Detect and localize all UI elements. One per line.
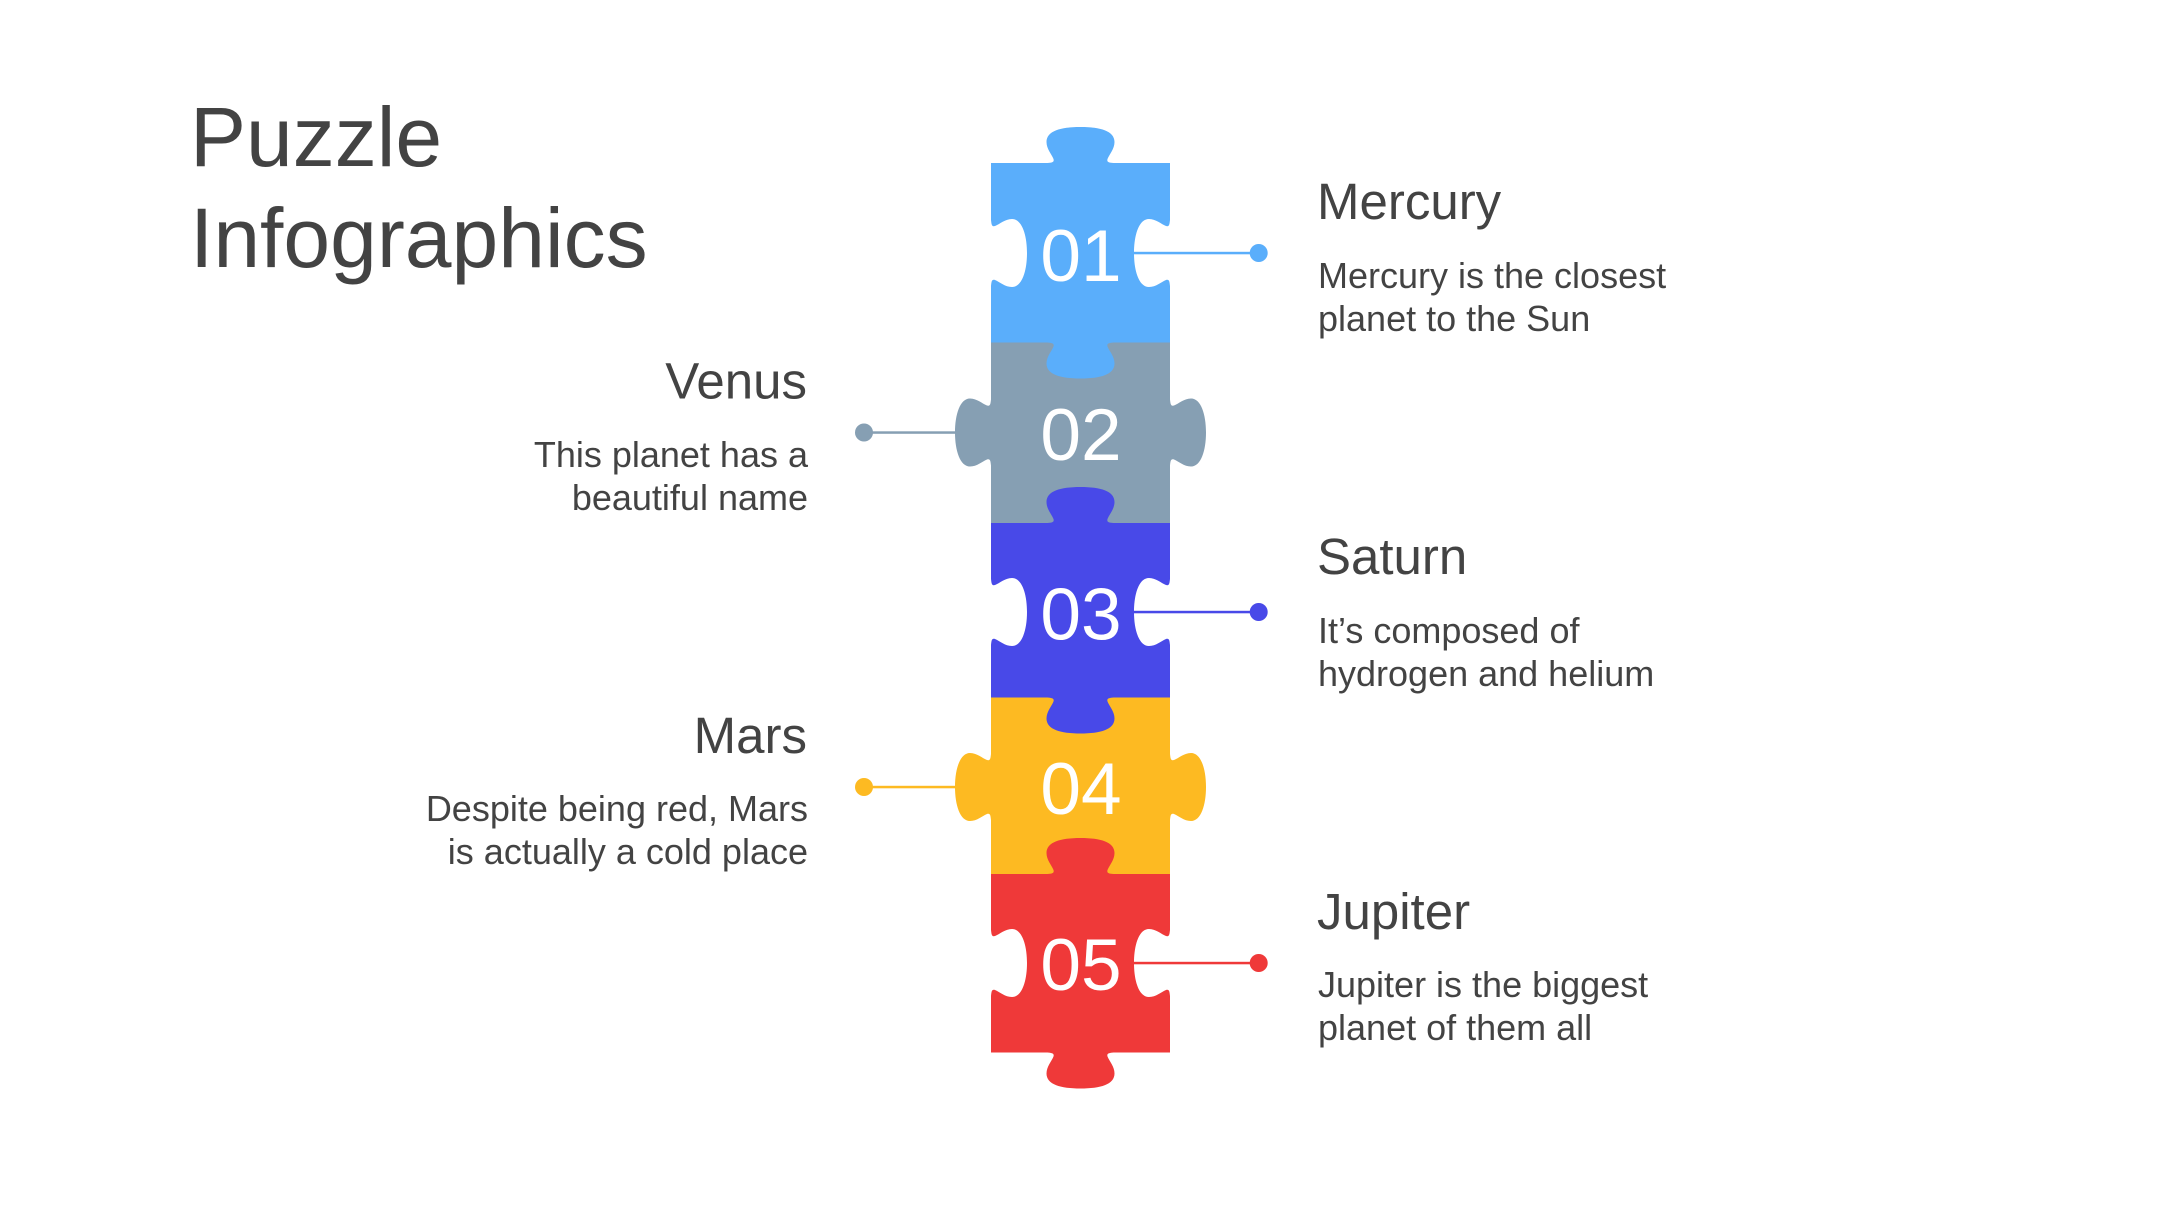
connector: 05 Jupiter [1130, 954, 1268, 972]
text block: Saturn: It’s composed of [1318, 610, 1580, 651]
title: Infographics [190, 191, 648, 285]
text block: Venus: Venus [665, 352, 807, 410]
text block: Jupiter [1317, 883, 1648, 1048]
text block: Mars: Mars [694, 707, 807, 764]
puzzle piece 04 [955, 697, 1206, 874]
number 02: 02 [1040, 395, 1122, 476]
text block: Mercury: Mercury is the closest [1318, 255, 1666, 296]
text block: Venus [534, 352, 809, 518]
connector: 02 Venus [855, 424, 960, 442]
text block: Mercury: Mercury [1317, 173, 1502, 230]
puzzle piece 01 [991, 127, 1170, 378]
title: Puzzle [190, 90, 442, 184]
text block: Jupiter: planet of them all [1318, 1007, 1592, 1048]
number 01: 01 [1040, 216, 1122, 297]
text block: Mars: is actually a cold place [448, 831, 808, 872]
text block: Saturn: hydrogen and helium [1318, 653, 1654, 694]
puzzle piece 05 [991, 838, 1170, 1088]
connector: 03 Saturn [1130, 603, 1268, 621]
number 04: 04 [1040, 749, 1122, 830]
connector: 04 Mars [855, 778, 960, 796]
text block: Venus: beautiful name [572, 477, 808, 518]
text block: Mars: Despite being red, Mars [426, 788, 808, 829]
title [190, 90, 648, 285]
text block: Mercury [1317, 173, 1666, 339]
number 03: 03 [1040, 574, 1122, 656]
number 05: 05 [1040, 925, 1122, 1006]
text block: Venus: This planet has a [534, 434, 809, 475]
text block: Saturn: Saturn [1317, 528, 1467, 585]
text block: Mercury: planet to the Sun [1318, 298, 1590, 339]
puzzle piece 02 [955, 342, 1206, 523]
text block: Jupiter: Jupiter [1317, 883, 1470, 940]
text block: Jupiter: Jupiter is the biggest [1318, 964, 1648, 1005]
text block: Saturn [1317, 528, 1654, 694]
puzzle piece 03 [991, 487, 1170, 734]
connector: 01 Mercury [1130, 244, 1268, 262]
text block: Mars [426, 707, 808, 872]
